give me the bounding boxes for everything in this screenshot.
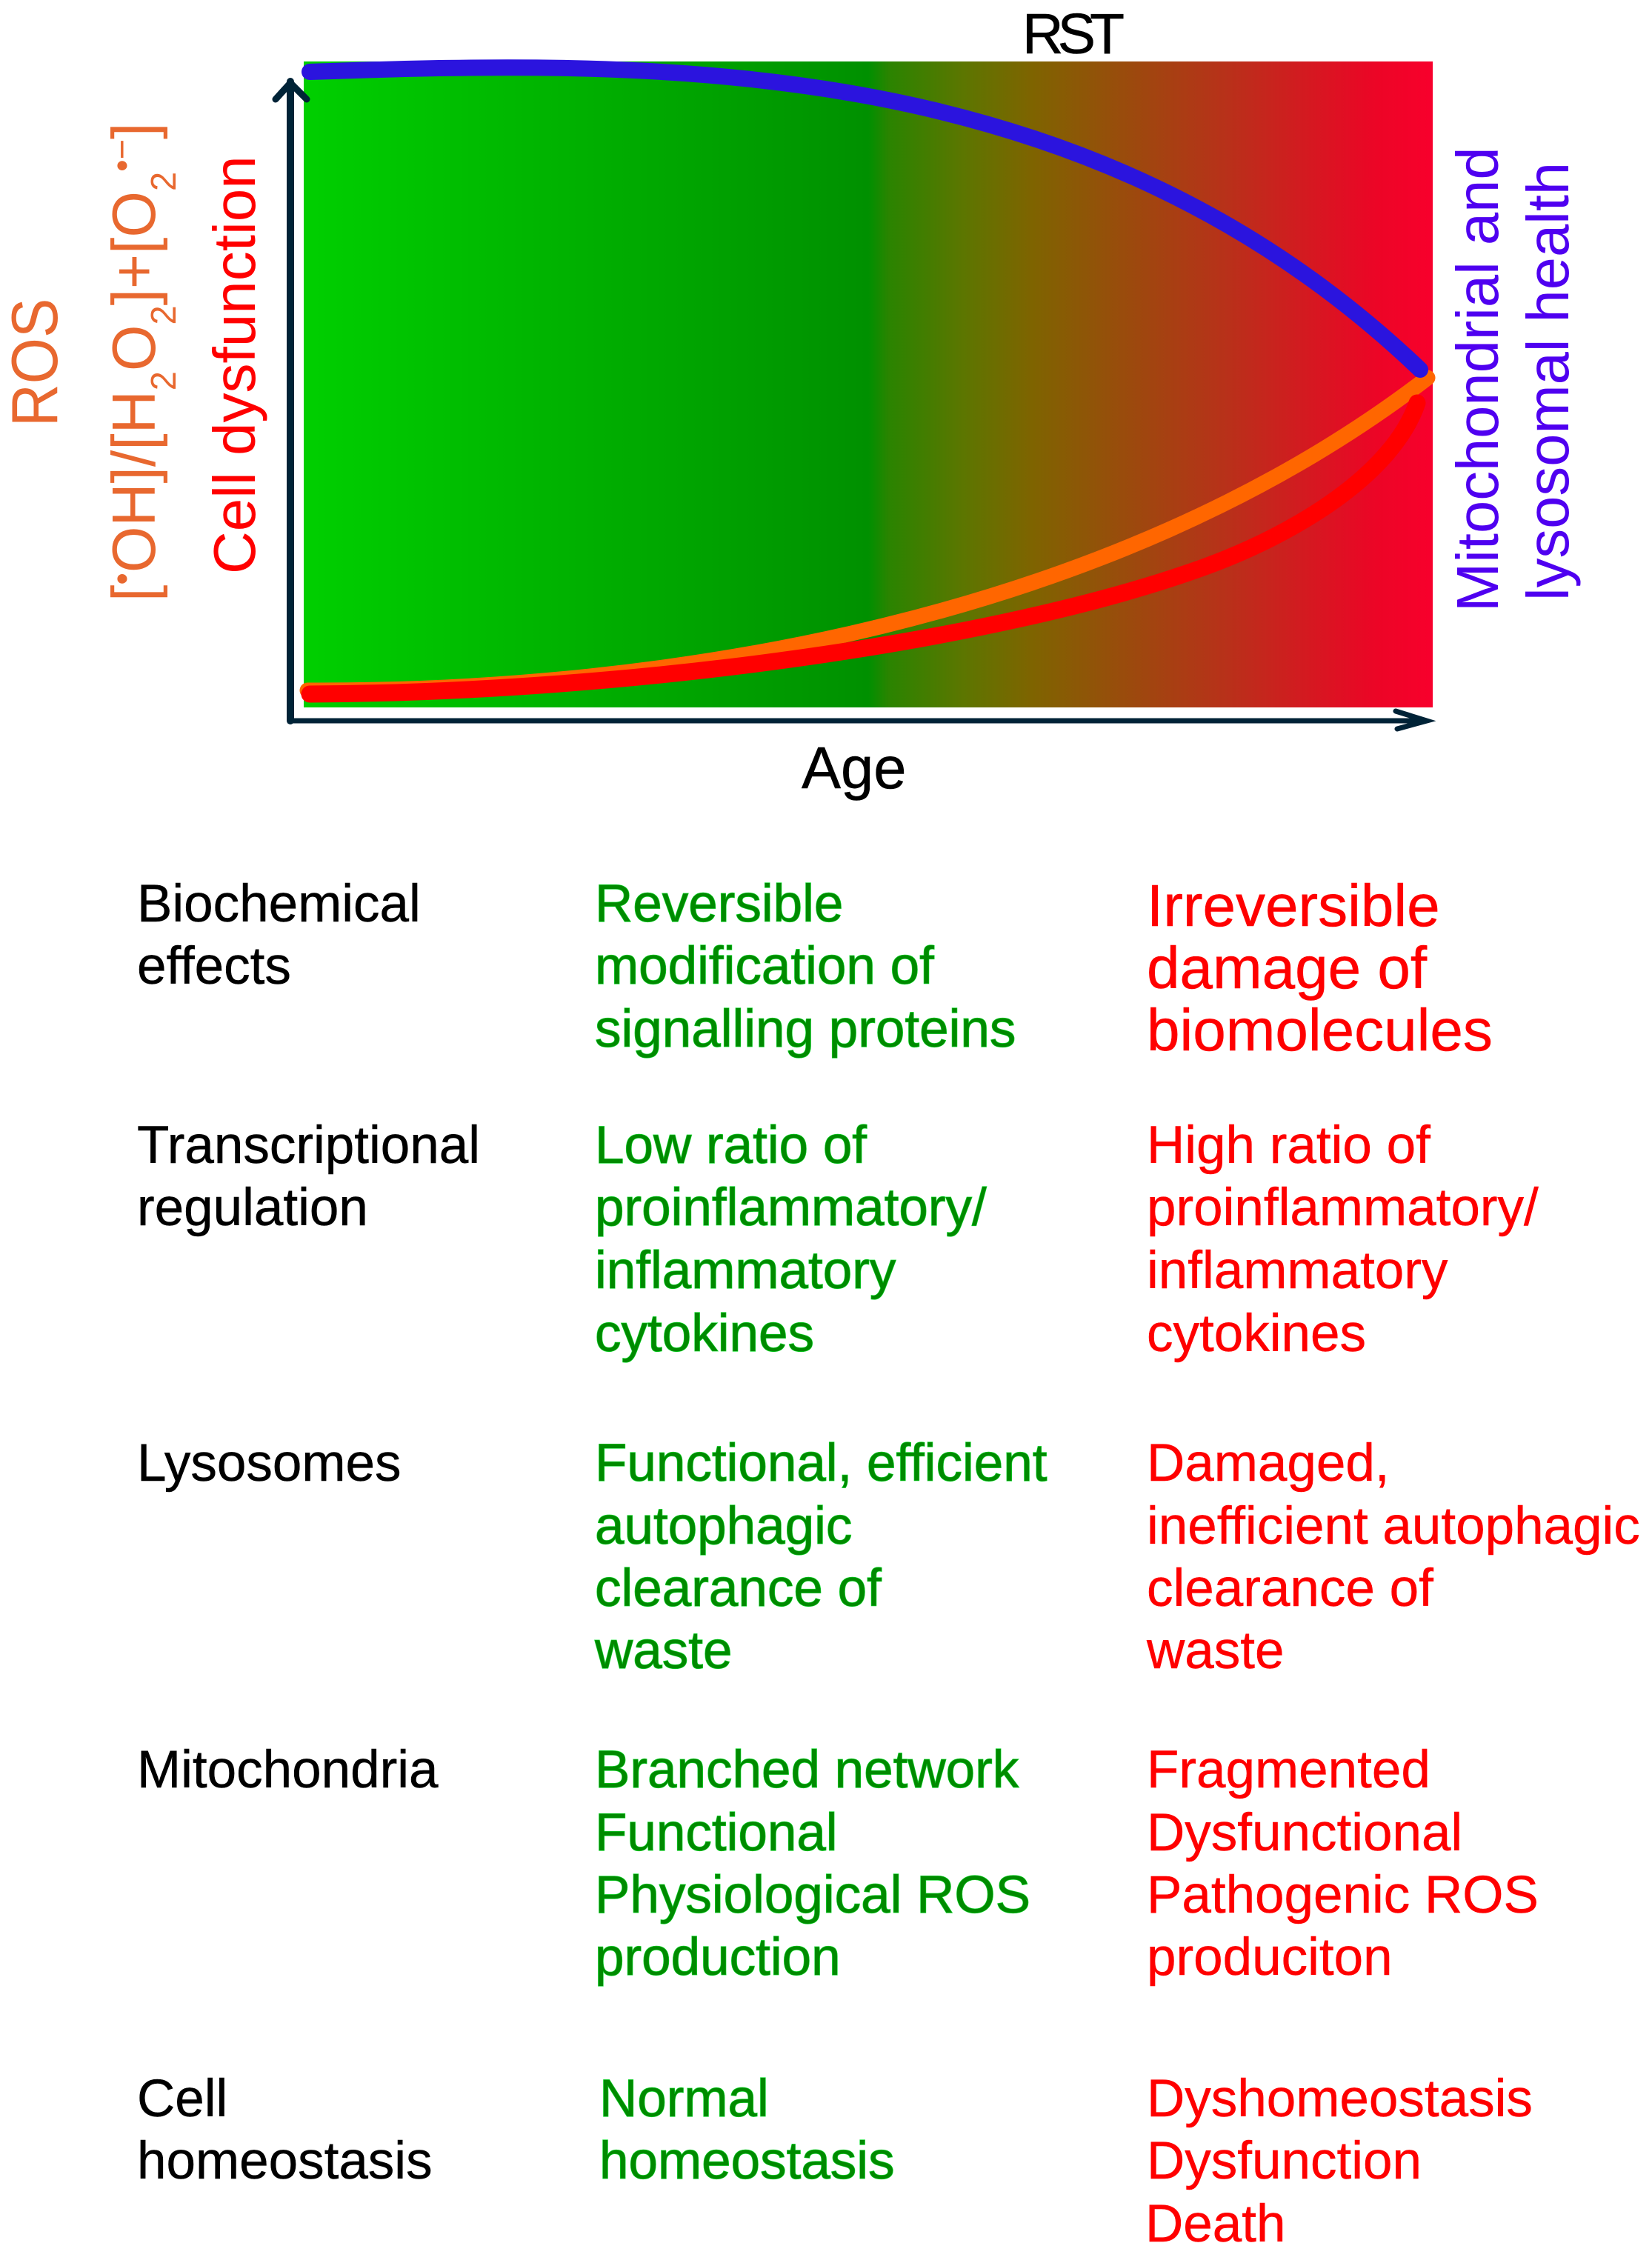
y label: radical ratio formula: OH]/[H: [100, 390, 168, 573]
curve: mitochondrial and lysosomal health blue: [310, 67, 1420, 370]
aged state: biomolecules: [1147, 997, 1493, 1063]
y label: radical ratio formula: •: [103, 573, 142, 585]
right label: Mitochondrial and lysosomal health: Mitochondrial and: [1445, 147, 1511, 612]
aged state: High ratio of: [1147, 1116, 1430, 1175]
row heading: Cell: [137, 2070, 227, 2128]
aged state: Damaged,: [1147, 1434, 1390, 1493]
young state: proinflammatory/: [595, 1179, 987, 1237]
y label: radical ratio formula: ]: [100, 123, 168, 139]
right label: Mitochondrial and lysosomal health: [1445, 147, 1581, 612]
aged state: Pathogenic ROS: [1147, 1866, 1539, 1924]
row heading: homeostasis: [137, 2132, 433, 2190]
aged state: clearance of: [1147, 1559, 1433, 1618]
aged state: inflammatory: [1147, 1242, 1448, 1300]
row: Biochemical effects: [137, 873, 1493, 1063]
row heading: regulation: [137, 1179, 368, 1237]
x axis arrow: [287, 711, 1427, 729]
young state: Low ratio of: [595, 1116, 867, 1175]
young state: modification of: [595, 937, 934, 996]
aged state: Dyshomeostasis: [1147, 2070, 1533, 2128]
aged state: Irreversible: [1147, 873, 1440, 939]
aged state: Fragmented: [1147, 1741, 1430, 1799]
aged state: damage of: [1147, 935, 1428, 1001]
aged state: inefficient autophagic: [1147, 1497, 1640, 1556]
young state: Functional, efficient: [595, 1434, 1048, 1493]
young state: production: [595, 1928, 841, 1987]
curve: cell dysfunction red: [310, 403, 1417, 694]
y label: radical ratio formula: [: [100, 585, 168, 601]
row heading: Mitochondria: [137, 1741, 439, 1799]
chart: RST gradient with curves: [276, 61, 1433, 729]
row heading: Transcriptional: [137, 1116, 480, 1175]
y label: radical ratio formula: 2: [144, 371, 184, 390]
label: Age: Age: [802, 735, 906, 801]
aged state: Dysfunctional: [1147, 1804, 1462, 1862]
y label: radical ratio formula: •−: [103, 139, 142, 172]
young state: inflammatory: [595, 1242, 896, 1300]
young state: signalling proteins: [595, 1000, 1016, 1059]
row heading: Lysosomes: [137, 1434, 401, 1493]
row heading: Biochemical: [137, 875, 421, 933]
y label: radical ratio formula: O: [100, 324, 168, 371]
y label: radical ratio formula: 2: [144, 172, 184, 191]
young state: Physiological ROS: [595, 1866, 1030, 1924]
young state: Normal: [599, 2070, 769, 2128]
row heading: effects: [137, 937, 291, 996]
label: RST: RST: [1022, 2, 1124, 66]
young state: cytokines: [595, 1304, 814, 1363]
young state: Branched network: [595, 1741, 1019, 1799]
young state: clearance of: [595, 1559, 882, 1618]
right label: Mitochondrial and lysosomal health: lysosomal health: [1515, 162, 1581, 601]
y axis arrow: [276, 81, 307, 721]
y label: Cell dysfunction: Cell dysfunction: [201, 156, 267, 574]
row: Mitochondria: [137, 1741, 1539, 1987]
aged state: proinflammatory/: [1147, 1179, 1539, 1237]
young state: waste: [594, 1622, 732, 1680]
y label: radical ratio formula: ]+[O: [100, 191, 168, 305]
aged state: waste: [1146, 1622, 1284, 1680]
aged state: Death: [1145, 2195, 1285, 2253]
row: Transcriptional regulation: [137, 1116, 1539, 1363]
aged state: cytokines: [1147, 1304, 1366, 1363]
young state: Reversible: [595, 875, 843, 933]
row: Cell homeostasis: [137, 2070, 1533, 2253]
aged state: Dysfunction: [1147, 2132, 1422, 2190]
aged state: produciton: [1147, 1928, 1393, 1987]
young state: homeostasis: [599, 2132, 895, 2190]
young state: Functional: [595, 1804, 838, 1862]
young state: autophagic: [595, 1497, 852, 1556]
gradient background: [304, 61, 1433, 707]
curve: ROS orange: [307, 378, 1428, 690]
y label: ROS: ROS: [0, 299, 71, 427]
row: Lysosomes: [137, 1434, 1640, 1680]
y label: radical ratio formula: 2: [144, 305, 184, 324]
